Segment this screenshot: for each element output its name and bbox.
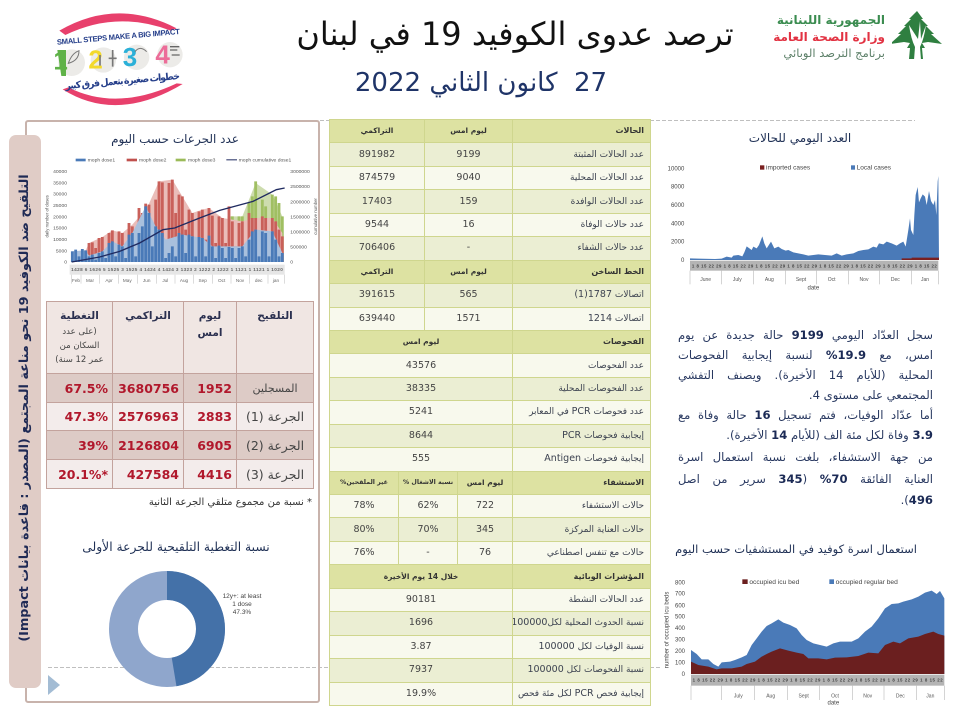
- table: vaccination: 20.1%*: [58, 466, 108, 482]
- icu beds area: [691, 632, 944, 674]
- cumulative line: [72, 188, 285, 262]
- chart: daily vaccine doses: Aug: [180, 278, 189, 283]
- chart: daily vaccine doses: Apr: [106, 278, 113, 283]
- logo: small steps make a big impact: 4: [155, 39, 170, 69]
- dose 1 pale fill: [71, 207, 283, 262]
- chart: first dose donut: 47.3%: [233, 609, 251, 616]
- legend: doses: moph dose2: [139, 158, 167, 164]
- table: cases, hotline, tests, hospitalization, indicators: 8644: [409, 430, 433, 441]
- table: cases, hotline, tests, hospitalization, indicators: 555: [412, 453, 430, 464]
- table: cases, hotline, tests, hospitalization, indicators: إيجابية فحوصات PCR: [562, 430, 644, 441]
- chart: daily cases: Jan: [921, 277, 929, 283]
- y axis: 4000: [671, 221, 685, 227]
- table: vaccination: [46, 301, 314, 489]
- chart: covid hospital beds: Aug: [766, 693, 775, 699]
- chart: daily vaccine doses: [45, 158, 318, 284]
- chart: covid hospital beds: [664, 579, 945, 707]
- chart: covid hospital beds: Oct: [831, 693, 839, 699]
- table: cases, hotline, tests, hospitalization, indicators: 639440: [359, 313, 395, 324]
- y axis: 6000: [671, 203, 685, 209]
- table: cases, hotline, tests, hospitalization, indicators: % نسبة الاشغال: [403, 479, 453, 486]
- y axes: 0: [65, 260, 68, 266]
- y axes: 35000: [53, 181, 68, 187]
- table: cases, hotline, tests, hospitalization, indicators: اتصالات 1787(1): [574, 289, 644, 300]
- y axis: [668, 166, 685, 264]
- ministry logo text: برنامج الترصد الوبائي: [783, 46, 885, 60]
- table: cases, hotline, tests, hospitalization, indicators: -: [467, 242, 470, 253]
- panel: vaccination side banner: [9, 135, 41, 688]
- logo: small steps make a big impact: SMALL STEPS MAKE A BIG IMPACT: [57, 27, 180, 47]
- dose 2 bars: [89, 180, 283, 262]
- chart: daily cases: Dec: [891, 277, 900, 283]
- y axes: 30000: [53, 192, 68, 198]
- table: vaccination: 2576963: [118, 409, 179, 424]
- chart: daily cases: Aug: [765, 277, 774, 283]
- table: cases, hotline, tests, hospitalization, indicators: 90181: [406, 594, 436, 605]
- table: cases, hotline, tests, hospitalization, indicators: اتصالات 1214: [588, 313, 644, 324]
- y axes: 2000000: [291, 200, 310, 206]
- table: vaccination: 67.5%: [65, 380, 108, 396]
- text block: summary: المحلية (للأيام 14 الأخيرة). ويصنف التفشي: [678, 368, 933, 382]
- chart: covid hospital beds: Dec: [896, 693, 905, 699]
- local cases area: [690, 176, 939, 260]
- table: cases, hotline, tests, hospitalization, indicators: 62%: [417, 500, 439, 511]
- table: cases, hotline, tests, hospitalization, indicators: عدد الفحوصات المحلية: [558, 384, 644, 394]
- dose 3 pale fill: [228, 183, 283, 262]
- y axes: 1500000: [291, 215, 310, 221]
- table: vaccination: امس: [198, 327, 222, 339]
- x axis: [691, 675, 944, 686]
- chart: daily vaccine doses: Sep: [199, 278, 208, 283]
- icon: cedar tree: [892, 11, 942, 59]
- text block: summary: سجل العدّاد اليومي 9199 حالة جديدة عن يوم: [678, 328, 933, 342]
- table: cases, hotline, tests, hospitalization, indicators: عدد حالات الشفاء: [577, 243, 644, 253]
- table: cases, hotline, tests, hospitalization, indicators: خلال 14 يوم الأخيرة: [384, 572, 458, 581]
- table: vaccination: السكان من: [60, 341, 99, 351]
- table: cases, hotline, tests, hospitalization, indicators: نسبة الحدوث المحلية لكل100000: [513, 617, 644, 628]
- x axis: [690, 261, 938, 271]
- y axis: 0: [682, 672, 686, 678]
- table: cases, hotline, tests, hospitalization, indicators: 874579: [359, 172, 395, 183]
- text block: summary: المجتمعي على مستوى 4.: [809, 388, 933, 402]
- table: cases, hotline, tests, hospitalization, indicators: الخط الساخن: [591, 267, 644, 276]
- chart: daily vaccine doses: Feb: [72, 278, 81, 283]
- legend: doses: moph dose3: [188, 158, 216, 164]
- chart: covid hospital beds: Nov: [863, 693, 873, 699]
- table: vaccination: 427584: [127, 466, 179, 482]
- table: vaccination: 2126804: [118, 438, 179, 452]
- table: vaccination: عمر 12 سنة): [55, 355, 104, 365]
- regular beds area: [691, 591, 944, 674]
- chart: first dose donut: 12y+: at least: [223, 593, 262, 600]
- y axis: 2000: [671, 240, 685, 246]
- chart: daily vaccine doses: Jul: [163, 278, 169, 283]
- y axis: 8000: [671, 185, 685, 191]
- text block: summary: 3.9 وفاة لكل مئة الف (للأيام 14 الأخيرة).: [726, 428, 933, 442]
- chart: daily vaccine doses: Mar: [86, 278, 95, 283]
- table: cases, hotline, tests, hospitalization, indicators: 38335: [406, 383, 436, 394]
- text block: summary: 496).: [901, 493, 933, 507]
- table: vaccination: 6905: [197, 438, 232, 452]
- legend: doses: [76, 158, 292, 164]
- ministry logo text: [773, 13, 885, 60]
- chart: covid hospital beds: number of occupied icu beds: [664, 592, 670, 668]
- table: cases, hotline, tests, hospitalization, indicators: 9199: [456, 149, 481, 160]
- chart: daily cases: June: [700, 277, 711, 283]
- table: cases, hotline, tests, hospitalization, indicators: إيجابية فحص PCR لكل مئة فحص: [518, 688, 644, 699]
- table: cases, hotline, tests, hospitalization, indicators: حالات العناية المركزة: [565, 525, 644, 535]
- table: cases, hotline, tests, hospitalization, indicators: الاستشفاء: [603, 478, 644, 487]
- y axes: 10000: [53, 237, 68, 243]
- table: cases, hotline, tests, hospitalization, indicators: عدد الفحوصات: [588, 361, 644, 371]
- y axis: 600: [675, 603, 686, 609]
- table: cases, hotline, tests, hospitalization, indicators: 565: [459, 289, 478, 300]
- date subtitle: 27 كانون الثاني 2022: [355, 68, 607, 98]
- table: cases, hotline, tests, hospitalization, indicators: ليوم امس: [467, 478, 503, 487]
- table: cases, hotline, tests, hospitalization, indicators: عدد الحالات الوافدة: [571, 197, 644, 207]
- table: cases, hotline, tests, hospitalization, indicators: 391615: [359, 289, 395, 300]
- y axes: cumulative number: [313, 198, 318, 235]
- table: cases, hotline, tests, hospitalization, indicators: عدد الحالات المثبتة: [573, 150, 644, 160]
- heading: daily doses: عدد الجرعات حسب اليوم: [111, 132, 239, 146]
- table: vaccination: الجرعة (3): [246, 466, 304, 482]
- y axes: 0: [291, 260, 294, 266]
- y axis: 300: [675, 638, 686, 644]
- chart: daily cases: 1 8 15 22 29 1 8 15 22 29 1 8 15 22 29 1 8 15 22 29 1 8 15 22 29 1 8 15 22 29 1 8 15 22 29 1 8 15 22: [692, 263, 937, 268]
- text block: summary: [678, 328, 933, 507]
- chart: daily cases: Sept: [796, 277, 807, 283]
- table: cases, hotline, tests, hospitalization, indicators: 80%: [353, 524, 375, 535]
- y axes: 20000: [53, 215, 68, 221]
- side banner text: التلقيح ضد الكوفيد 19 نحو مناعة المجتمع (المصدر : قاعدة بيانات Impact): [17, 174, 32, 642]
- y axes: 40000: [53, 169, 68, 175]
- chart: first dose donut: 1 dose: [232, 601, 252, 608]
- table: cases, hotline, tests, hospitalization, indicators: نسبة الوفيات لكل 100000: [538, 641, 644, 652]
- table: vaccination: المسجلين: [252, 382, 298, 394]
- legend: cases: Local cases: [857, 165, 892, 172]
- y axes: 500000: [291, 245, 308, 251]
- table: cases, hotline, tests, hospitalization, indicators: ليوم امس: [450, 126, 487, 135]
- table: cases, hotline, tests, hospitalization, indicators: 722: [476, 500, 494, 511]
- dose 2 pale fill: [73, 180, 283, 262]
- table: vaccination: 47.3%: [65, 409, 108, 424]
- table: vaccination: 39%: [78, 438, 108, 452]
- y axis: 0: [681, 258, 685, 264]
- y axes: daily number of doses: [45, 195, 50, 238]
- ministry logo text: وزارة الصحة العامة: [773, 30, 885, 44]
- table: vaccination: الجرعة (2): [246, 438, 304, 452]
- chart: daily cases: July: [733, 277, 742, 283]
- title: ترصد عدوى الكوفيد 19 في لبنان: [296, 15, 734, 53]
- y axis: 700: [675, 592, 686, 598]
- legend: doses: moph dose1: [88, 158, 116, 164]
- table: vaccination: 4416: [197, 466, 232, 482]
- logo: small steps make a big impact: 2: [88, 44, 103, 74]
- table: cases, hotline, tests, hospitalization, indicators: 706406: [359, 242, 395, 253]
- table: cases, hotline, tests, hospitalization, indicators: %غير الملقحين: [340, 479, 388, 486]
- chart: daily cases: Oct: [828, 277, 836, 283]
- dose 3 bars: [229, 182, 283, 262]
- dose 1 bars: [73, 207, 283, 262]
- y axis: 400: [675, 626, 686, 632]
- logo: small steps make a big impact: خطوات صغيرة بتعمل فرق كبير: [64, 71, 181, 92]
- table: cases, hotline, tests, hospitalization, indicators: 345: [476, 524, 494, 535]
- y axes: [45, 169, 318, 266]
- chart: covid hospital beds: Jan: [926, 693, 935, 699]
- table: cases, hotline, tests, hospitalization, indicators: 16: [462, 219, 475, 230]
- panel: vaccination: [25, 120, 320, 703]
- table: cases, hotline, tests, hospitalization, indicators: -: [426, 547, 430, 558]
- table: cases, hotline, tests, hospitalization, indicators: التراكمي: [361, 126, 393, 135]
- heading: hospital beds: استعمال اسرة كوفيد في المستشفيات حسب اليوم: [675, 542, 917, 556]
- table: cases, hotline, tests, hospitalization, indicators: [329, 119, 651, 706]
- legend: doses: moph cumulative dose1: [239, 158, 292, 164]
- y axis: [675, 580, 686, 678]
- table: cases, hotline, tests, hospitalization, indicators: المؤشرات الوبائية: [574, 572, 644, 581]
- chart: covid hospital beds: 1 8 15 22 29 1 8 15 22 29 1 8 15 22 29 1 8 15 22 29 1 8 15 22 29 1 8 15 22 29 1 8 15 22 29 1 8 15 22: [693, 678, 943, 683]
- table: cases, hotline, tests, hospitalization, indicators: ليوم امس: [450, 267, 487, 276]
- y axes: 15000: [53, 226, 68, 232]
- table: cases, hotline, tests, hospitalization, indicators: التراكمي: [361, 267, 393, 276]
- chart: covid hospital beds: date: [827, 701, 840, 707]
- text block: summary: أما عدّاد الوفيات، فتم تسجيل 16 حالة وفاة مع: [678, 408, 933, 422]
- table: cases, hotline, tests, hospitalization, indicators: 76: [479, 547, 491, 558]
- y axes: 2500000: [291, 184, 310, 190]
- y axis: 200: [675, 649, 686, 655]
- table: cases, hotline, tests, hospitalization, indicators: الفحوصات: [603, 337, 644, 346]
- table: cases, hotline, tests, hospitalization, indicators: 17403: [362, 196, 392, 207]
- x axis: [70, 265, 285, 275]
- chart: daily vaccine doses: May: [123, 278, 133, 283]
- y axes: 1000000: [291, 230, 310, 236]
- y axis: 100: [675, 661, 686, 667]
- chart: first dose donut: [109, 571, 262, 687]
- ministry logo text: الجمهورية اللبنانية: [777, 13, 885, 27]
- chart: daily cases: [668, 165, 939, 292]
- legend: beds: [742, 579, 898, 586]
- chart: daily vaccine doses: dec: [255, 278, 263, 283]
- table: cases, hotline, tests, hospitalization, indicators: 43576: [406, 360, 436, 371]
- table: cases, hotline, tests, hospitalization, indicators: 78%: [353, 500, 375, 511]
- legend: cases: imported cases: [766, 165, 811, 172]
- table: cases, hotline, tests, hospitalization, indicators: 891982: [359, 149, 395, 160]
- table: cases, hotline, tests, hospitalization, indicators: 76%: [353, 547, 375, 558]
- table: cases, hotline, tests, hospitalization, indicators: ليوم امس: [403, 337, 439, 346]
- footnote: * نسبة من مجموع متلقي الجرعة الثانية: [149, 497, 312, 508]
- y axes: 3000000: [291, 169, 310, 175]
- table: cases, hotline, tests, hospitalization, indicators: حالات مع تنفس اصطناعي: [547, 548, 644, 558]
- chart: daily vaccine doses: Jun: [143, 278, 151, 283]
- table: vaccination: 1952: [197, 380, 232, 396]
- logo: small steps make a big impact: 1: [53, 45, 68, 75]
- heading: first dose coverage: نسبة التغطية التلقيحية للجرعة الأولى: [82, 540, 270, 554]
- table: cases, hotline, tests, hospitalization, indicators: عدد حالات الوفاة: [581, 220, 644, 230]
- logo: small steps make a big impact: [53, 13, 182, 106]
- y axes: 5000: [56, 249, 68, 255]
- table: cases, hotline, tests, hospitalization, indicators: حالات الاستشفاء: [582, 501, 644, 511]
- table: vaccination: التلقيح: [257, 310, 293, 322]
- table: cases, hotline, tests, hospitalization, indicators: 7937: [409, 664, 433, 675]
- table: cases, hotline, tests, hospitalization, indicators: 1696: [409, 617, 433, 628]
- legend: beds: occupied icu bed: [749, 579, 800, 586]
- legend: beds: occupied regular bed: [836, 579, 898, 586]
- chart: daily vaccine doses: Nov: [236, 278, 245, 283]
- table: vaccination: 3680756: [118, 380, 179, 396]
- text block: summary: من جهة الاستشفاء، بلغت نسبة استعمال اسرة: [678, 450, 933, 464]
- table: cases, hotline, tests, hospitalization, indicators: 5241: [409, 406, 433, 417]
- arrow: panel marker: [48, 675, 60, 695]
- table: vaccination: التغطية: [60, 310, 99, 322]
- legend: cases: [760, 165, 892, 172]
- text block: summary: امس، مع 19.9% لنسبة إيجابية الفحوصات: [678, 348, 933, 362]
- y axis: 10000: [668, 166, 685, 172]
- table: cases, hotline, tests, hospitalization, indicators: 70%: [417, 524, 439, 535]
- table: cases, hotline, tests, hospitalization, indicators: الحالات: [616, 126, 644, 135]
- table: cases, hotline, tests, hospitalization, indicators: 9040: [456, 172, 481, 183]
- logo: small steps make a big impact: 3: [123, 42, 137, 72]
- table: vaccination: الجرعة (1): [246, 409, 304, 424]
- heading: daily cases: العدد اليومي للحالات: [749, 131, 851, 145]
- chart: daily cases: Nov: [860, 277, 869, 283]
- table: cases, hotline, tests, hospitalization, indicators: عدد الحالات المحلية: [570, 173, 644, 183]
- table: cases, hotline, tests, hospitalization, indicators: نسبة الفحوصات لكل 100000: [527, 664, 644, 675]
- table: vaccination: ليوم: [199, 310, 221, 322]
- table: cases, hotline, tests, hospitalization, indicators: عدد فحوصات PCR في المعابر: [529, 406, 644, 417]
- imported cases area: [902, 258, 939, 260]
- table: cases, hotline, tests, hospitalization, indicators: 3.87: [410, 641, 432, 652]
- table: cases, hotline, tests, hospitalization, indicators: 19.9%: [406, 688, 436, 699]
- chart: daily vaccine doses: Oct: [218, 278, 226, 283]
- table: cases, hotline, tests, hospitalization, indicators: 159: [459, 196, 478, 207]
- table: vaccination: التراكمي: [125, 310, 171, 322]
- y axes: 25000: [53, 203, 68, 209]
- chart: daily cases: date: [807, 286, 820, 292]
- table: vaccination: 2883: [197, 409, 232, 424]
- chart: daily vaccine doses: jan: [272, 278, 280, 283]
- table: cases, hotline, tests, hospitalization, indicators: عدد الحالات النشطة: [569, 595, 644, 605]
- table: cases, hotline, tests, hospitalization, indicators: 1571: [456, 313, 481, 324]
- chart: covid hospital beds: July: [734, 693, 743, 699]
- table: cases, hotline, tests, hospitalization, indicators: 9544: [365, 219, 389, 230]
- y axis: 500: [675, 615, 686, 621]
- chart: daily vaccine doses: 1428 6 1626 5 1525 3 1525 4 1424 4 1424 3 1323 2 1222 2 1222 1 1121 1 1121 1 1020: [71, 267, 284, 272]
- table: cases, hotline, tests, hospitalization, indicators: إيجابية فحوصات Antigen: [544, 453, 644, 464]
- table: vaccination: (على عدد: [62, 327, 97, 337]
- chart: covid hospital beds: Sept: [799, 693, 809, 699]
- text block: summary: العناية الفائقة 70% (345 سرير من اصل: [678, 472, 933, 486]
- y axis: 800: [675, 580, 686, 586]
